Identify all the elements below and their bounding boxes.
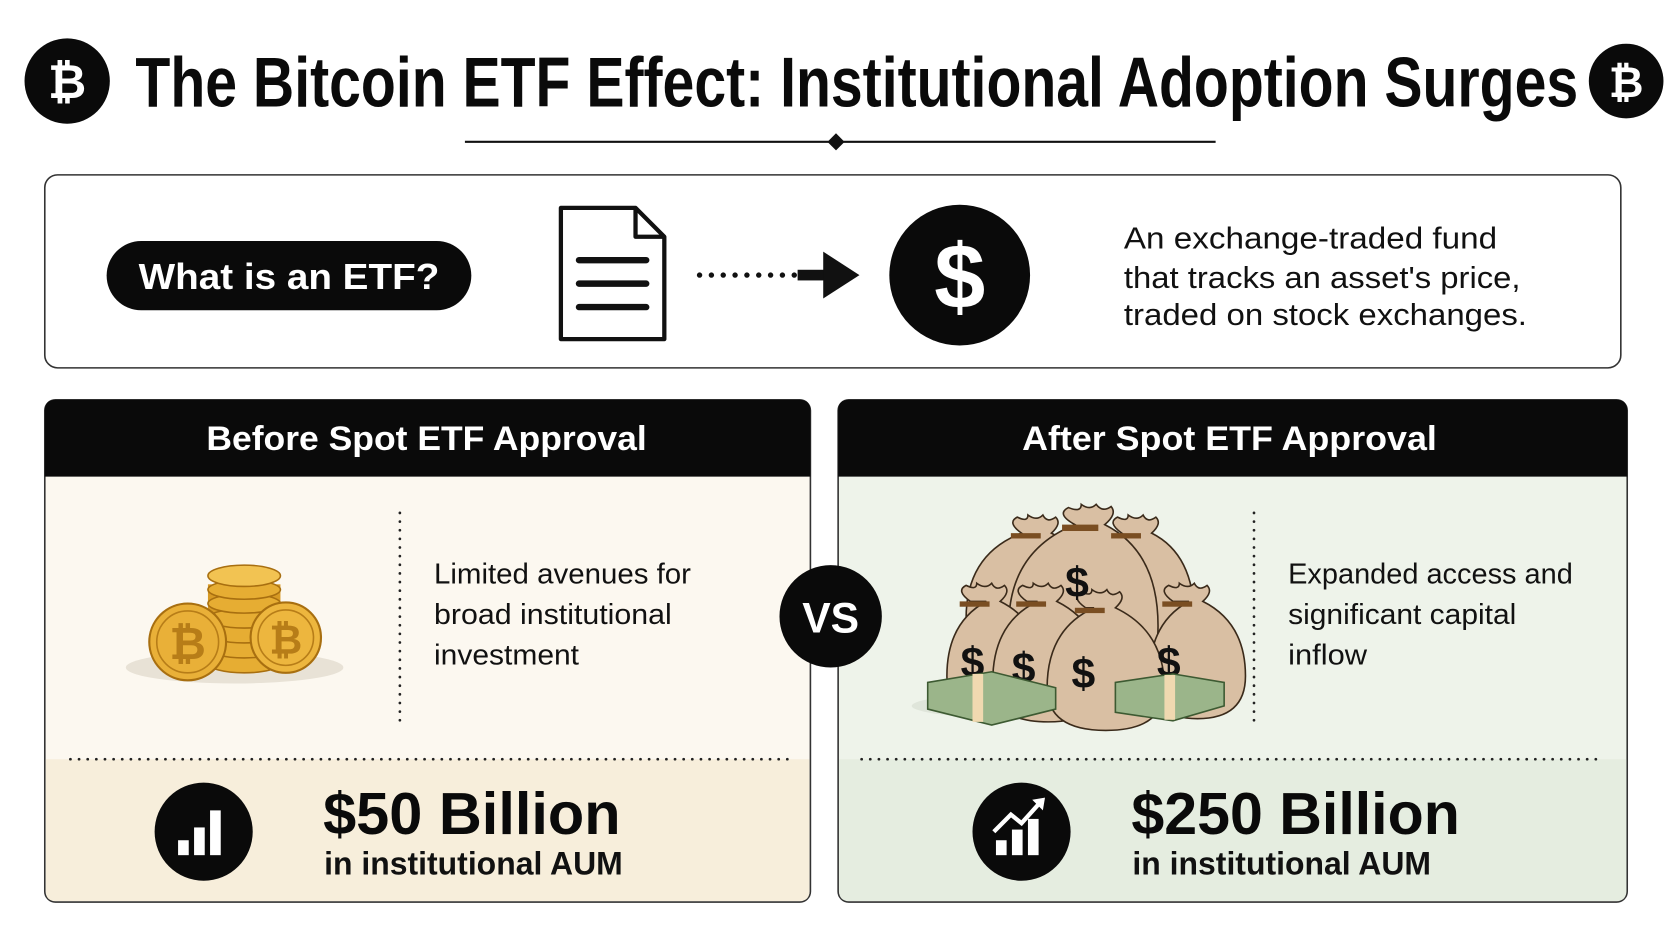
text: ETF definition: traded on stock exchanges. (1124, 297, 1527, 332)
icon: document (561, 208, 664, 339)
icon: money bags: $ (1065, 559, 1089, 607)
panel: before (45, 400, 810, 902)
icon: bitcoin right: ₿ (1609, 59, 1644, 107)
stat: $250 Billion (1131, 780, 1460, 881)
icon: rising chart (972, 783, 1071, 881)
text: before description: broad institutional (434, 599, 672, 631)
icon: money bags: $ (1012, 644, 1036, 692)
icon: bitcoin coins (126, 565, 343, 683)
text: before description (434, 558, 691, 671)
icon: bitcoin left: ₿ (48, 56, 86, 108)
stat: $50 Billion: in institutional AUM (324, 845, 623, 881)
text: ETF definition (1124, 220, 1527, 332)
arrow: dotted (700, 252, 859, 299)
icon: bitcoin right (1589, 44, 1663, 118)
text: before description: investment (434, 639, 579, 671)
panel: after (838, 400, 1627, 902)
pill: What is an ETF (107, 241, 471, 310)
stat: $250 Billion: in institutional AUM (1132, 845, 1431, 881)
header: after (838, 400, 1627, 477)
text: after description: significant capital (1288, 599, 1516, 631)
pill: What is an ETF: What is an ETF? (139, 256, 439, 297)
text: after description: inflow (1288, 639, 1367, 671)
icon: money bags: $ (961, 639, 985, 687)
panel: what is an ETF (45, 175, 1621, 368)
text: before description: Limited avenues for (434, 558, 691, 590)
icon: money bags: $ (1157, 639, 1181, 687)
stat: $50 Billion (323, 780, 623, 881)
icon: dollar circle: $ (934, 226, 985, 328)
text: after description: Expanded access and (1288, 558, 1573, 590)
text: after description (1288, 558, 1573, 671)
icon: bar chart (155, 783, 253, 881)
badge: VS: VS (802, 594, 859, 642)
icon: money bags (912, 504, 1245, 730)
icon: bitcoin coins: ₿ (169, 619, 206, 669)
icon: bitcoin left (25, 38, 110, 124)
text: ETF definition: that tracks an asset's price, (1124, 260, 1521, 295)
icon: bitcoin coins: ₿ (269, 617, 302, 663)
icon: dollar circle (889, 205, 1030, 345)
badge: VS (779, 565, 882, 667)
header: before: Before Spot ETF Approval (206, 420, 647, 458)
icon: money bags: $ (1072, 650, 1096, 698)
header: after: After Spot ETF Approval (1022, 420, 1437, 458)
text: ETF definition: An exchange-traded fund (1124, 220, 1497, 255)
stat: $250 Billion: $250 Billion (1131, 780, 1460, 847)
header: before (45, 400, 810, 477)
stat: $50 Billion: $50 Billion (323, 780, 621, 847)
